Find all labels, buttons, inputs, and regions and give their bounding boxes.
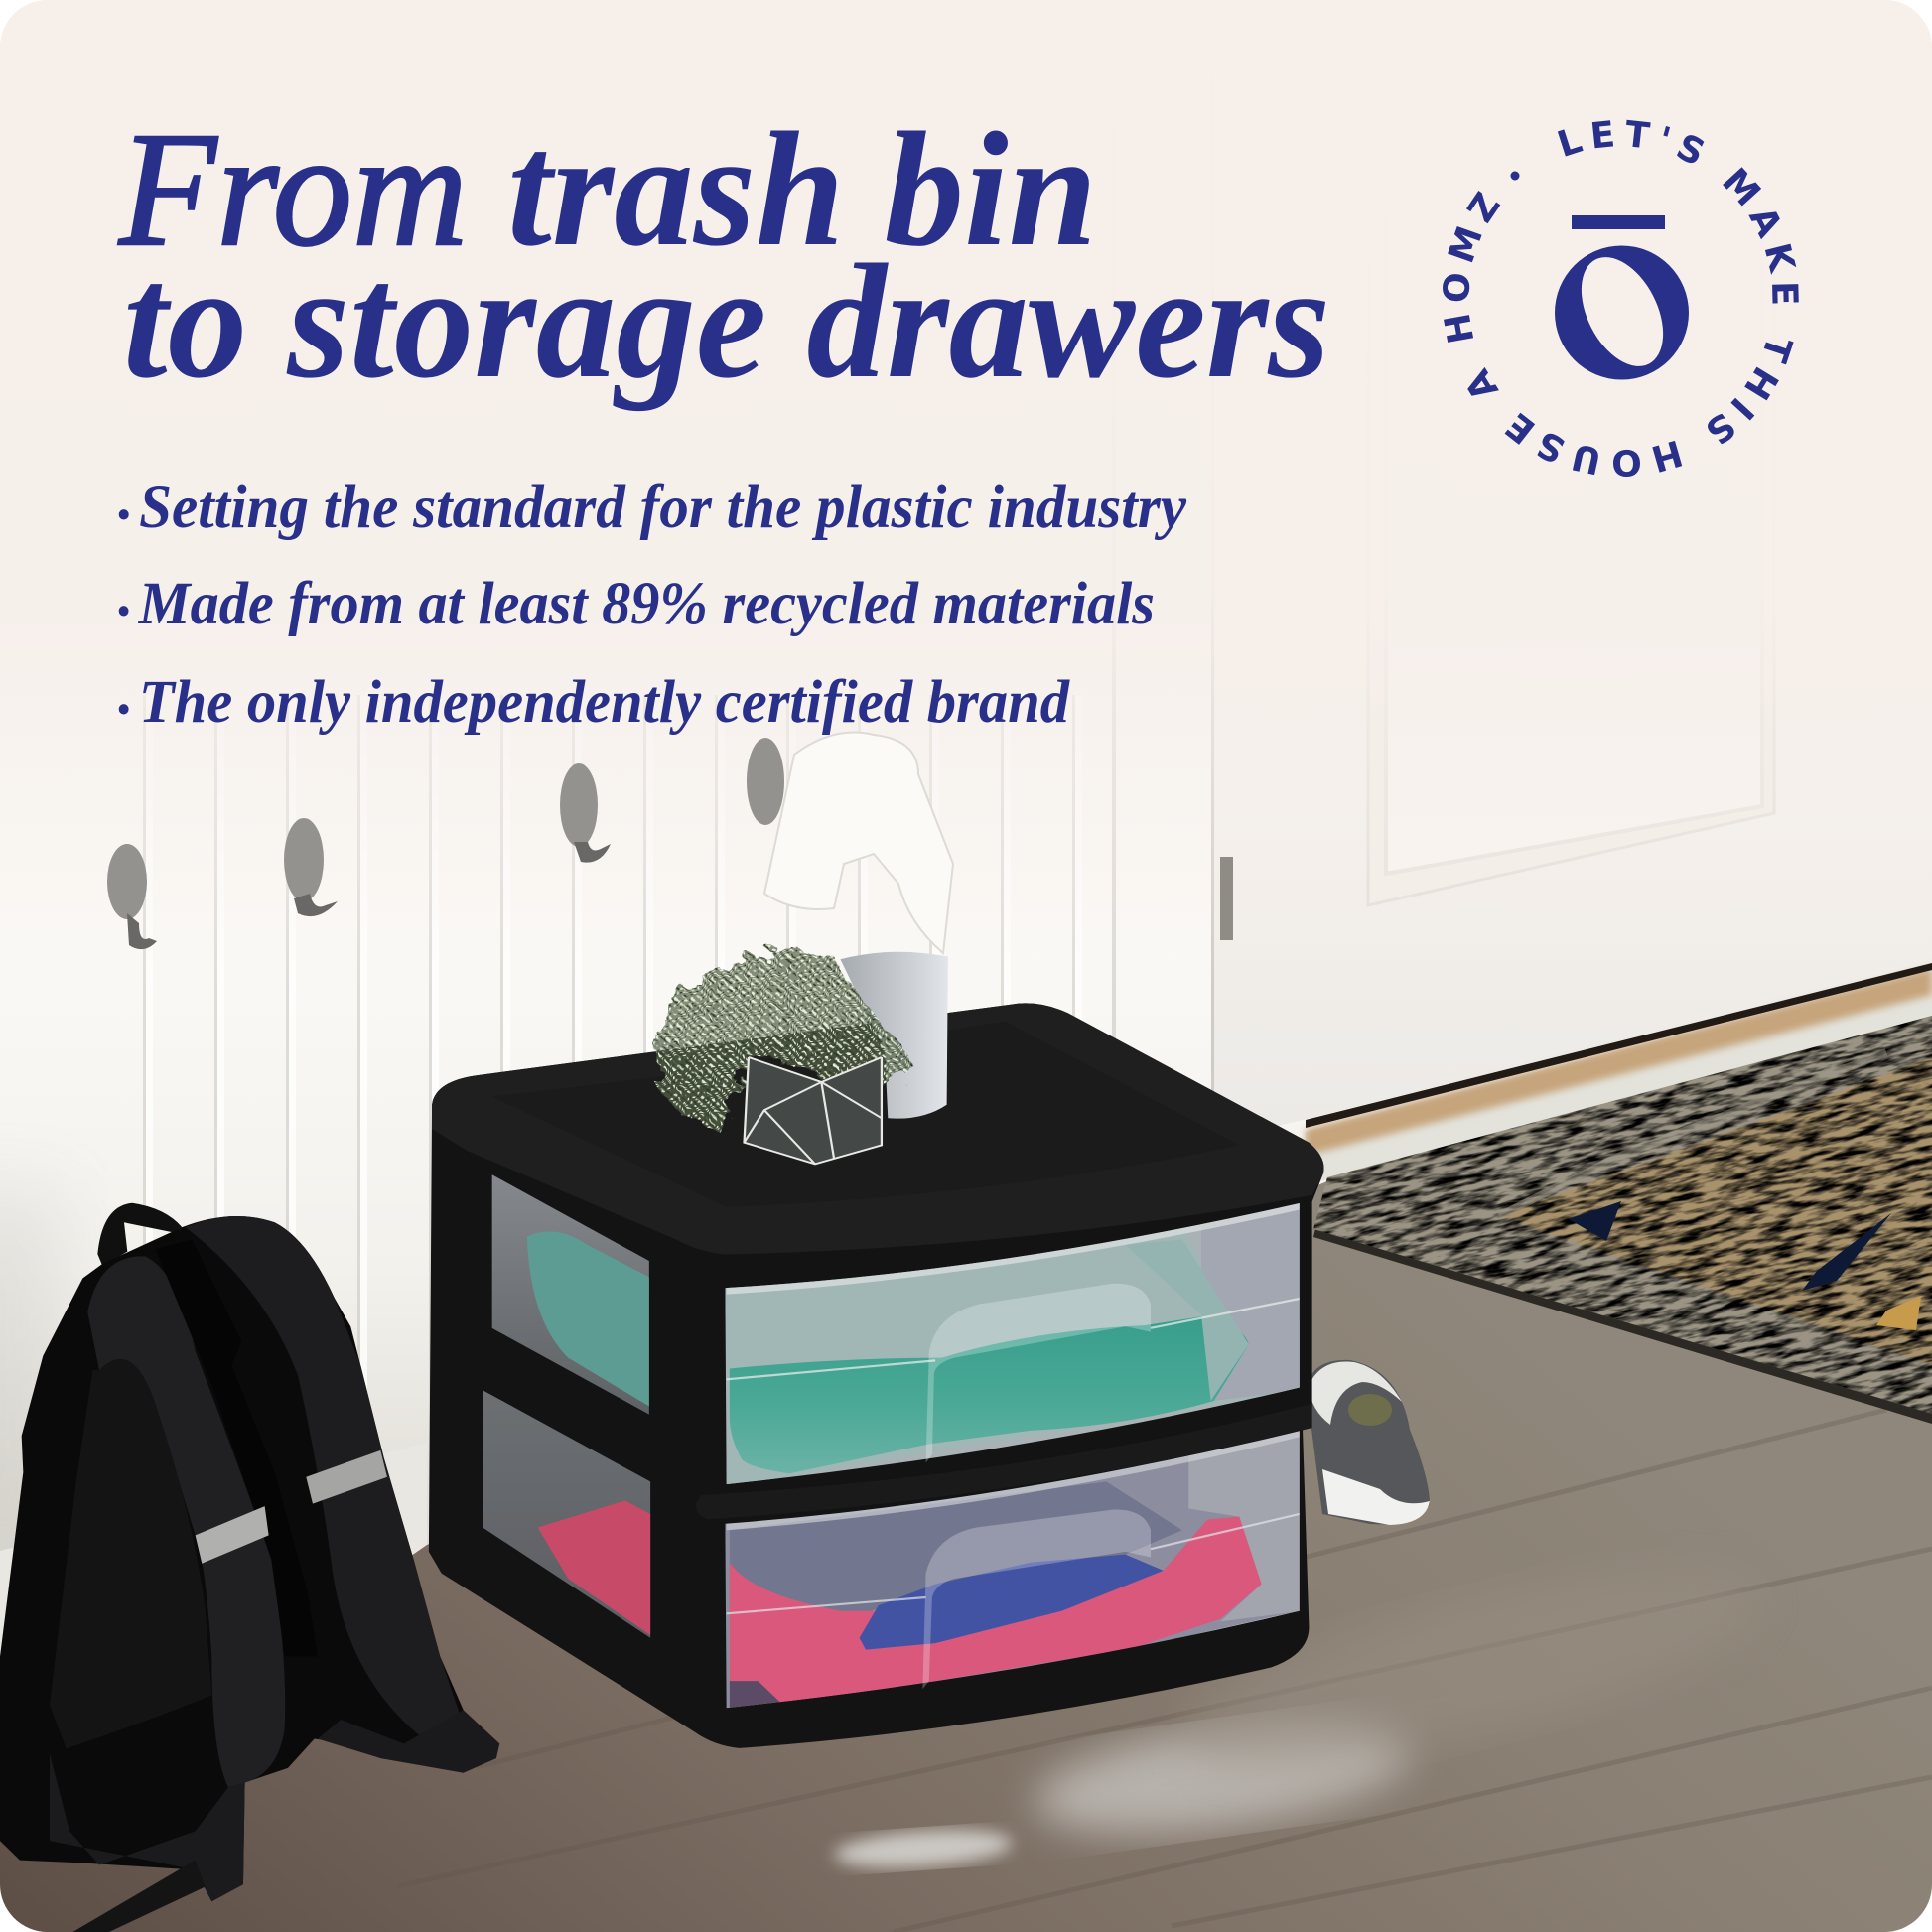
blue folded garment xyxy=(860,1555,1164,1650)
teal clothes seen through side xyxy=(527,1231,649,1406)
door threshold strip xyxy=(1306,963,1932,1185)
logo letter o xyxy=(1555,244,1689,379)
patterned rug xyxy=(1313,1016,1932,1424)
circular slogan: LET'S MAKE THIS HOUSE A HOMZ xyxy=(1443,119,1799,477)
floor xyxy=(0,1013,1932,1932)
right foot strap xyxy=(318,1710,499,1773)
mesh back xyxy=(156,1239,318,1656)
door hinge xyxy=(1220,857,1233,940)
pink clothes seen through side xyxy=(538,1500,650,1635)
lower left strap xyxy=(50,1753,245,1901)
storage drawers unit xyxy=(429,949,1324,1748)
middle frame rail xyxy=(696,1404,1312,1519)
frame silhouette xyxy=(429,1003,1324,1748)
upper drawer window xyxy=(714,1196,1309,1492)
bullet one: • Setting the standard for the plastic industry xyxy=(117,475,1187,541)
bullet list xyxy=(117,475,1187,736)
foliage xyxy=(653,949,919,1132)
title line two: to storage drawers xyxy=(123,230,1330,412)
reflective strip left xyxy=(196,1506,269,1564)
bullet three: • The only independently certified brand xyxy=(117,669,1070,736)
carry handle xyxy=(97,1203,182,1266)
pink folded garment xyxy=(730,1517,1262,1705)
lower side window xyxy=(483,1390,650,1638)
glass terrarium and plant group xyxy=(653,949,948,1164)
upper drawer handle xyxy=(926,1284,1151,1462)
circular brand badge xyxy=(1443,119,1799,477)
lower drawer window xyxy=(714,1428,1309,1714)
geometric planter xyxy=(745,1057,882,1164)
backpack xyxy=(0,1203,499,1932)
trailing strap xyxy=(72,1861,206,1932)
logo macron bar xyxy=(1572,215,1665,229)
grey can xyxy=(840,952,948,1119)
top recess xyxy=(492,1022,1239,1207)
baseboard xyxy=(0,1443,427,1840)
backpack body silhouette xyxy=(0,1216,464,1901)
pack panel xyxy=(50,1359,211,1748)
badge dot xyxy=(1511,171,1519,181)
title line one: From trash bin xyxy=(118,98,1097,280)
left shoulder strap xyxy=(87,1256,285,1787)
upper side window xyxy=(492,1174,649,1415)
wall hooks xyxy=(107,738,784,949)
reflective strip right xyxy=(306,1450,387,1504)
bullet two: • Made from at least 89% recycled materials xyxy=(117,571,1155,637)
teal folded garment xyxy=(730,1314,1249,1473)
right shoulder strap xyxy=(186,1216,460,1739)
title xyxy=(118,98,1330,412)
shoe xyxy=(1307,1360,1430,1525)
top surface xyxy=(432,1003,1324,1255)
hanging white jacket xyxy=(764,733,953,953)
lower drawer handle xyxy=(922,1510,1151,1689)
